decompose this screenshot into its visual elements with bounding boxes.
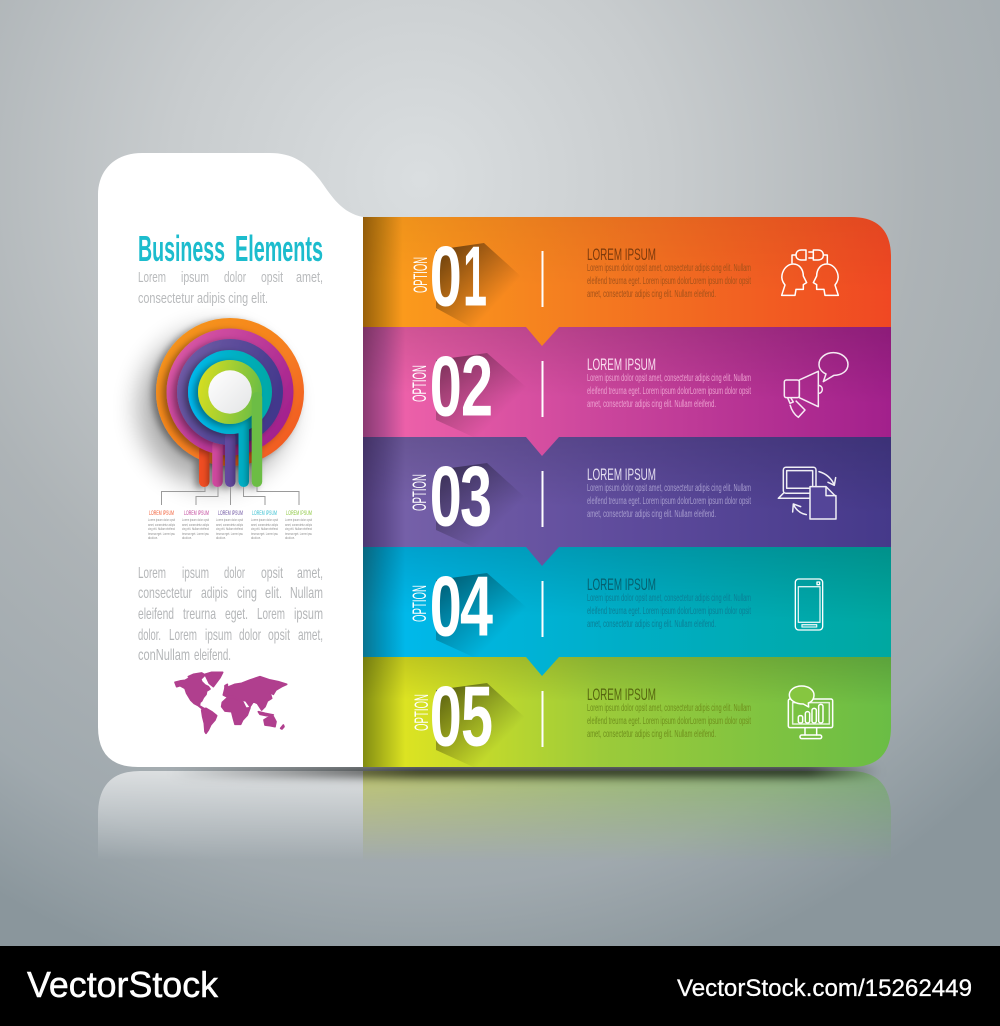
magenta ring: [166, 328, 294, 487]
body text 05: Lorem ipsum dolor opsit amet, consectetur adipis cing elit. Nullam: [587, 703, 751, 714]
mini column body text: dolor.: [216, 535, 226, 540]
lower paragraph: ipsum: [182, 565, 209, 582]
band 1: orange: [363, 217, 891, 346]
band 4: blue: [363, 547, 891, 676]
mini column body text: cing elit. Nullam eleifend: [148, 526, 175, 531]
mini column body text: cing elit. Nullam eleifend: [216, 526, 243, 531]
number shadow 01: [436, 243, 517, 326]
intro text: consectetur adipis cing elit.: [138, 290, 268, 307]
mini column body text: Lorem ipsum dolor opsit: [251, 517, 279, 522]
icon: smartphone: [795, 579, 823, 630]
lower paragraph: eleifend: [138, 606, 174, 623]
connector lines: [162, 487, 299, 505]
lower paragraph: eget.: [225, 606, 248, 623]
mini column body text: Lorem ipsum dolor opsit: [285, 517, 313, 522]
body text 03: [587, 483, 751, 520]
floor reflection: colored bands: [363, 771, 891, 850]
ring chart soft shadow: [138, 330, 290, 486]
mini column body text: Lorem ipsum dolor opsit: [148, 517, 176, 522]
number shadow 05: [436, 683, 520, 766]
option label 04: OPTION: [410, 585, 431, 622]
mini column body text: cing elit. Nullam eleifend: [285, 526, 312, 531]
body text 01: Lorem ipsum dolor opsit amet, consectetur adipis cing elit. Nullam: [587, 263, 751, 274]
mini column body text: amet, consectetur adipis: [182, 522, 209, 527]
lower paragraph: Nullam: [290, 585, 323, 602]
panel: white folder tab: [98, 153, 363, 767]
mini column body text: cing elit. Nullam eleifend: [251, 526, 278, 531]
mini column body text: cing elit. Nullam eleifend: [182, 526, 209, 531]
floor reflection: white panel: [98, 771, 363, 860]
ring center: [208, 370, 252, 414]
body text 03: eleifend treurna eget. Lorem ipsum dolorLorem ipsum dolor opsit: [587, 496, 751, 507]
mini column body text: amet, consectetur adipis: [285, 522, 312, 527]
option label 03: OPTION: [410, 474, 431, 511]
icon: laptop and document transfer: [778, 467, 836, 519]
icon: monitor with chart: [788, 686, 833, 739]
orange ring: [156, 318, 304, 487]
lower paragraph: Lorem: [169, 627, 197, 644]
body text 04: [587, 593, 751, 630]
divider 05: [542, 691, 544, 747]
body text 03: Lorem ipsum dolor opsit amet, consectetur adipis cing elit. Nullam: [587, 483, 751, 494]
divider 01: [542, 251, 544, 307]
mini column body text: amet, consectetur adipis: [148, 522, 175, 527]
lower paragraph: cing: [237, 585, 257, 602]
mini column body text: dolor.: [285, 535, 295, 540]
mini column labels: LOREM IPSUM: [149, 511, 174, 517]
body text 01: amet, consectetur adipis cing elit. Nullam eleifend.: [587, 289, 716, 300]
intro text: dolor: [224, 269, 246, 286]
heading 01: LOREM IPSUM: [587, 245, 656, 264]
number 03: 3: [460, 450, 492, 544]
number shadow 03: [436, 463, 518, 544]
mini column body text: dolor.: [251, 535, 261, 540]
number 03: 0: [430, 450, 462, 544]
body text 05: eleifend treurna eget. Lorem ipsum dolorLorem ipsum dolor opsit: [587, 716, 751, 727]
mini column body text: dolor.: [182, 535, 192, 540]
body text 04: eleifend treurna eget. Lorem ipsum dolorLorem ipsum dolor opsit: [587, 606, 751, 617]
body text 02: [587, 373, 751, 410]
band 1: orange: OPTION: [411, 257, 432, 293]
mini column body text: treurna eget. Lorem ipsu: [251, 531, 278, 536]
title: Elements: [235, 228, 323, 269]
divider 04: [542, 581, 544, 637]
number 02: 2: [461, 340, 493, 434]
lower paragraph: ipsum: [205, 627, 232, 644]
lower paragraph: Lorem: [138, 565, 166, 582]
lower paragraph: [138, 565, 323, 664]
body text 04: Lorem ipsum dolor opsit amet, consectetur adipis cing elit. Nullam: [587, 593, 751, 604]
purple ring: [177, 339, 283, 487]
lower paragraph: amet,: [297, 565, 323, 582]
body text 05: amet, consectetur adipis cing elit. Nullam eleifend.: [587, 729, 716, 740]
mini column body text: Lorem ipsum dolor opsit: [182, 517, 210, 522]
body text 02: Lorem ipsum dolor opsit amet, consectetur adipis cing elit. Nullam: [587, 373, 751, 384]
mini column body text: dolor.: [148, 535, 158, 540]
icon: megaphone with speech bubble: [784, 353, 848, 417]
body text 02: amet, consectetur adipis cing elit. Nullam eleifend.: [587, 399, 716, 410]
number 04: 4: [460, 560, 493, 654]
lower paragraph: Lorem: [257, 606, 285, 623]
intro text: Lorem: [138, 269, 166, 286]
body text 04: amet, consectetur adipis cing elit. Nullam eleifend.: [587, 619, 716, 630]
band 2: magenta: [363, 327, 891, 456]
lower paragraph: adipis: [201, 585, 228, 602]
mini column body text: treurna eget. Lorem ipsu: [148, 531, 175, 536]
body text 01: eleifend treurna eget. Lorem ipsum dolorLorem ipsum dolor opsit: [587, 276, 751, 287]
mini column labels: LOREM IPSUM: [218, 511, 243, 517]
body text 03: amet, consectetur adipis cing elit. Nullam eleifend.: [587, 509, 716, 520]
circular ring chart: [138, 318, 304, 487]
heading 04: LOREM IPSUM: [587, 575, 656, 594]
mini column labels: LOREM IPSUM: [184, 511, 209, 517]
divider 02: [542, 361, 544, 417]
body text 02: eleifend treurna eget. Lorem ipsum dolorLorem ipsum dolor opsit: [587, 386, 751, 397]
blue ring: [188, 350, 272, 487]
lower paragraph: treurna: [183, 606, 216, 623]
mini column body text: treurna eget. Lorem ipsu: [285, 531, 312, 536]
heading 02: LOREM IPSUM: [587, 355, 656, 374]
footer image id: VectorStock.com/15262449: [677, 975, 972, 1002]
band 5: green: [363, 657, 891, 770]
intro text: [138, 269, 323, 307]
band 3: purple: [363, 437, 891, 566]
mini column body text: treurna eget. Lorem ipsu: [182, 531, 209, 536]
number 05: 0: [430, 670, 462, 764]
lower paragraph: dolor: [239, 627, 261, 644]
option label 02: OPTION: [410, 365, 431, 402]
intro text: ipsum: [181, 269, 209, 286]
lower paragraph: conNullam: [138, 647, 190, 664]
green ring: [198, 360, 262, 487]
intro text: opsit: [261, 269, 284, 286]
footer bar: [0, 946, 1000, 1026]
footer brand: VectorStock: [27, 964, 219, 1005]
number shadow 04: [436, 573, 521, 656]
world map: [175, 672, 287, 733]
body text 01: [587, 263, 751, 300]
icon: two heads connected by plug: [782, 250, 838, 295]
number 04: 0: [430, 560, 462, 654]
mini column body text: amet, consectetur adipis: [216, 522, 243, 527]
lower paragraph: amet,: [298, 627, 323, 644]
lower paragraph: ipsum: [294, 606, 323, 623]
lower paragraph: dolor: [224, 565, 245, 582]
body text 05: [587, 703, 751, 740]
option label 05: OPTION: [412, 694, 433, 731]
lower paragraph: eleifend.: [194, 647, 231, 664]
mini column body text: treurna eget. Lorem ipsu: [216, 531, 243, 536]
mini column labels: LOREM IPSUM: [286, 511, 312, 517]
intro text: amet,: [296, 269, 323, 286]
mini column labels: [149, 511, 312, 517]
lower paragraph: opsit: [268, 627, 290, 644]
number shadow 02: [436, 353, 520, 435]
lower paragraph: dolor.: [138, 627, 161, 644]
mini column body text: Lorem ipsum dolor opsit: [216, 517, 244, 522]
divider 03: [542, 471, 544, 527]
number 02: 0: [430, 340, 462, 434]
title: Business: [138, 228, 225, 269]
number 01: 1: [463, 230, 487, 324]
heading 05: LOREM IPSUM: [587, 685, 656, 704]
mini column body text: [148, 517, 313, 540]
number 05: 5: [461, 670, 493, 764]
mini column labels: LOREM IPSUM: [252, 511, 277, 517]
lower paragraph: consectetur: [138, 585, 192, 602]
mini column body text: amet, consectetur adipis: [251, 522, 278, 527]
number 01: 0: [430, 230, 462, 324]
lower paragraph: elit.: [265, 585, 282, 602]
contact shadow under card: [170, 766, 880, 777]
heading 03: LOREM IPSUM: [587, 465, 656, 484]
lower paragraph: opsit: [261, 565, 283, 582]
